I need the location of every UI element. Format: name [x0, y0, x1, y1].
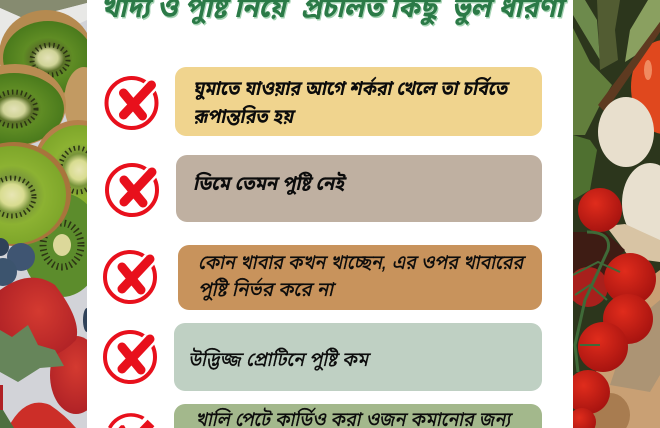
item 2	[107, 155, 542, 222]
statement 1	[175, 67, 542, 136]
item 2: ডিমে তেমন পুষ্টি নেই	[193, 171, 348, 195]
statement 5	[174, 404, 542, 428]
item 4: উদ্ভিজ্জ প্রোটিনে পুষ্টি কম	[188, 347, 371, 371]
item 3: পুষ্টি নির্ভর করে না	[198, 277, 336, 301]
item 1: ঘুমাতে যাওয়ার আগে শর্করা খেলে তা চর্বিতে	[193, 76, 510, 100]
item 1	[106, 67, 542, 136]
icon: red cross in circle	[107, 165, 157, 215]
icon: red cross in circle	[109, 414, 158, 428]
statement 4	[174, 323, 542, 391]
statement 2	[176, 155, 542, 222]
item 3	[105, 245, 542, 310]
statement 3	[178, 245, 542, 310]
item 4	[105, 323, 542, 391]
photo: vegetables	[566, 0, 660, 428]
icon: red cross in circle	[105, 252, 155, 302]
item 3: কোন খাবার কখন খাচ্ছেন, এর ওপর খাবারের	[198, 252, 527, 274]
item 5	[109, 404, 542, 428]
icon: red cross in circle	[105, 332, 155, 382]
photo: kiwi and strawberries	[0, 0, 87, 428]
icon: red cross in circle	[106, 78, 156, 128]
item 1: রূপান্তরিত হয়	[193, 104, 296, 128]
